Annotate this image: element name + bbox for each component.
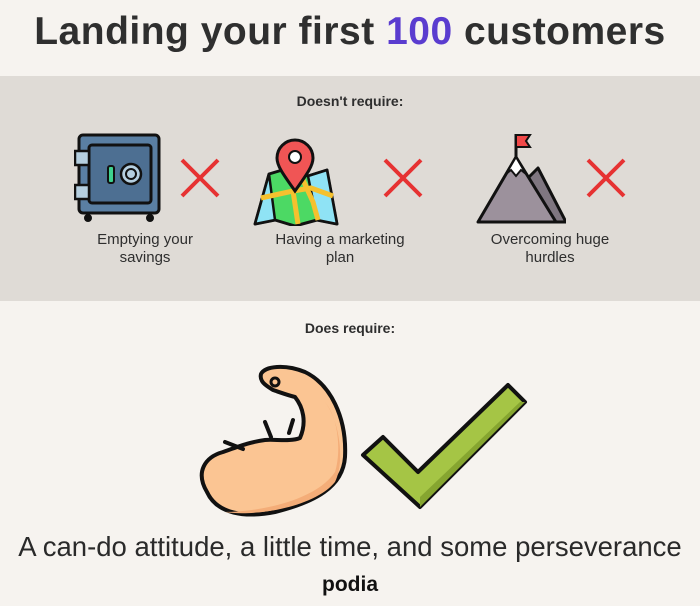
title: Landing your first 100 customers: [34, 10, 666, 53]
label: emptying your savings: savings: [120, 249, 170, 266]
label: having a marketing plan: plan: [326, 249, 354, 266]
panel: doesn't require: [0, 76, 700, 301]
logo: podia: podia: [322, 573, 378, 596]
icon: cross 3: [586, 158, 626, 198]
icon: map: [254, 138, 338, 226]
icon: cross 1: [180, 158, 220, 198]
label: overcoming huge hurdles: Overcoming huge: [491, 231, 609, 248]
label: overcoming huge hurdles: hurdles: [525, 249, 575, 266]
icon: mountain: [476, 134, 566, 224]
heading: doesn't require: Doesn't require:: [297, 93, 403, 109]
heading: does require: Does require:: [305, 320, 395, 336]
label: emptying your savings: [97, 231, 193, 266]
label: having a marketing plan: [275, 231, 405, 266]
icon: flexed arm: [200, 364, 348, 516]
icon: safe: [74, 134, 160, 222]
label: having a marketing plan: Having a marketing: [275, 231, 405, 248]
label: emptying your savings: Emptying your: [97, 231, 193, 248]
label: overcoming huge hurdles: [491, 231, 609, 266]
icon: cross 2: [384, 158, 422, 198]
icon: check mark: [360, 382, 528, 510]
caption: A can-do attitude, a little time, and some perseverance: [18, 531, 682, 562]
